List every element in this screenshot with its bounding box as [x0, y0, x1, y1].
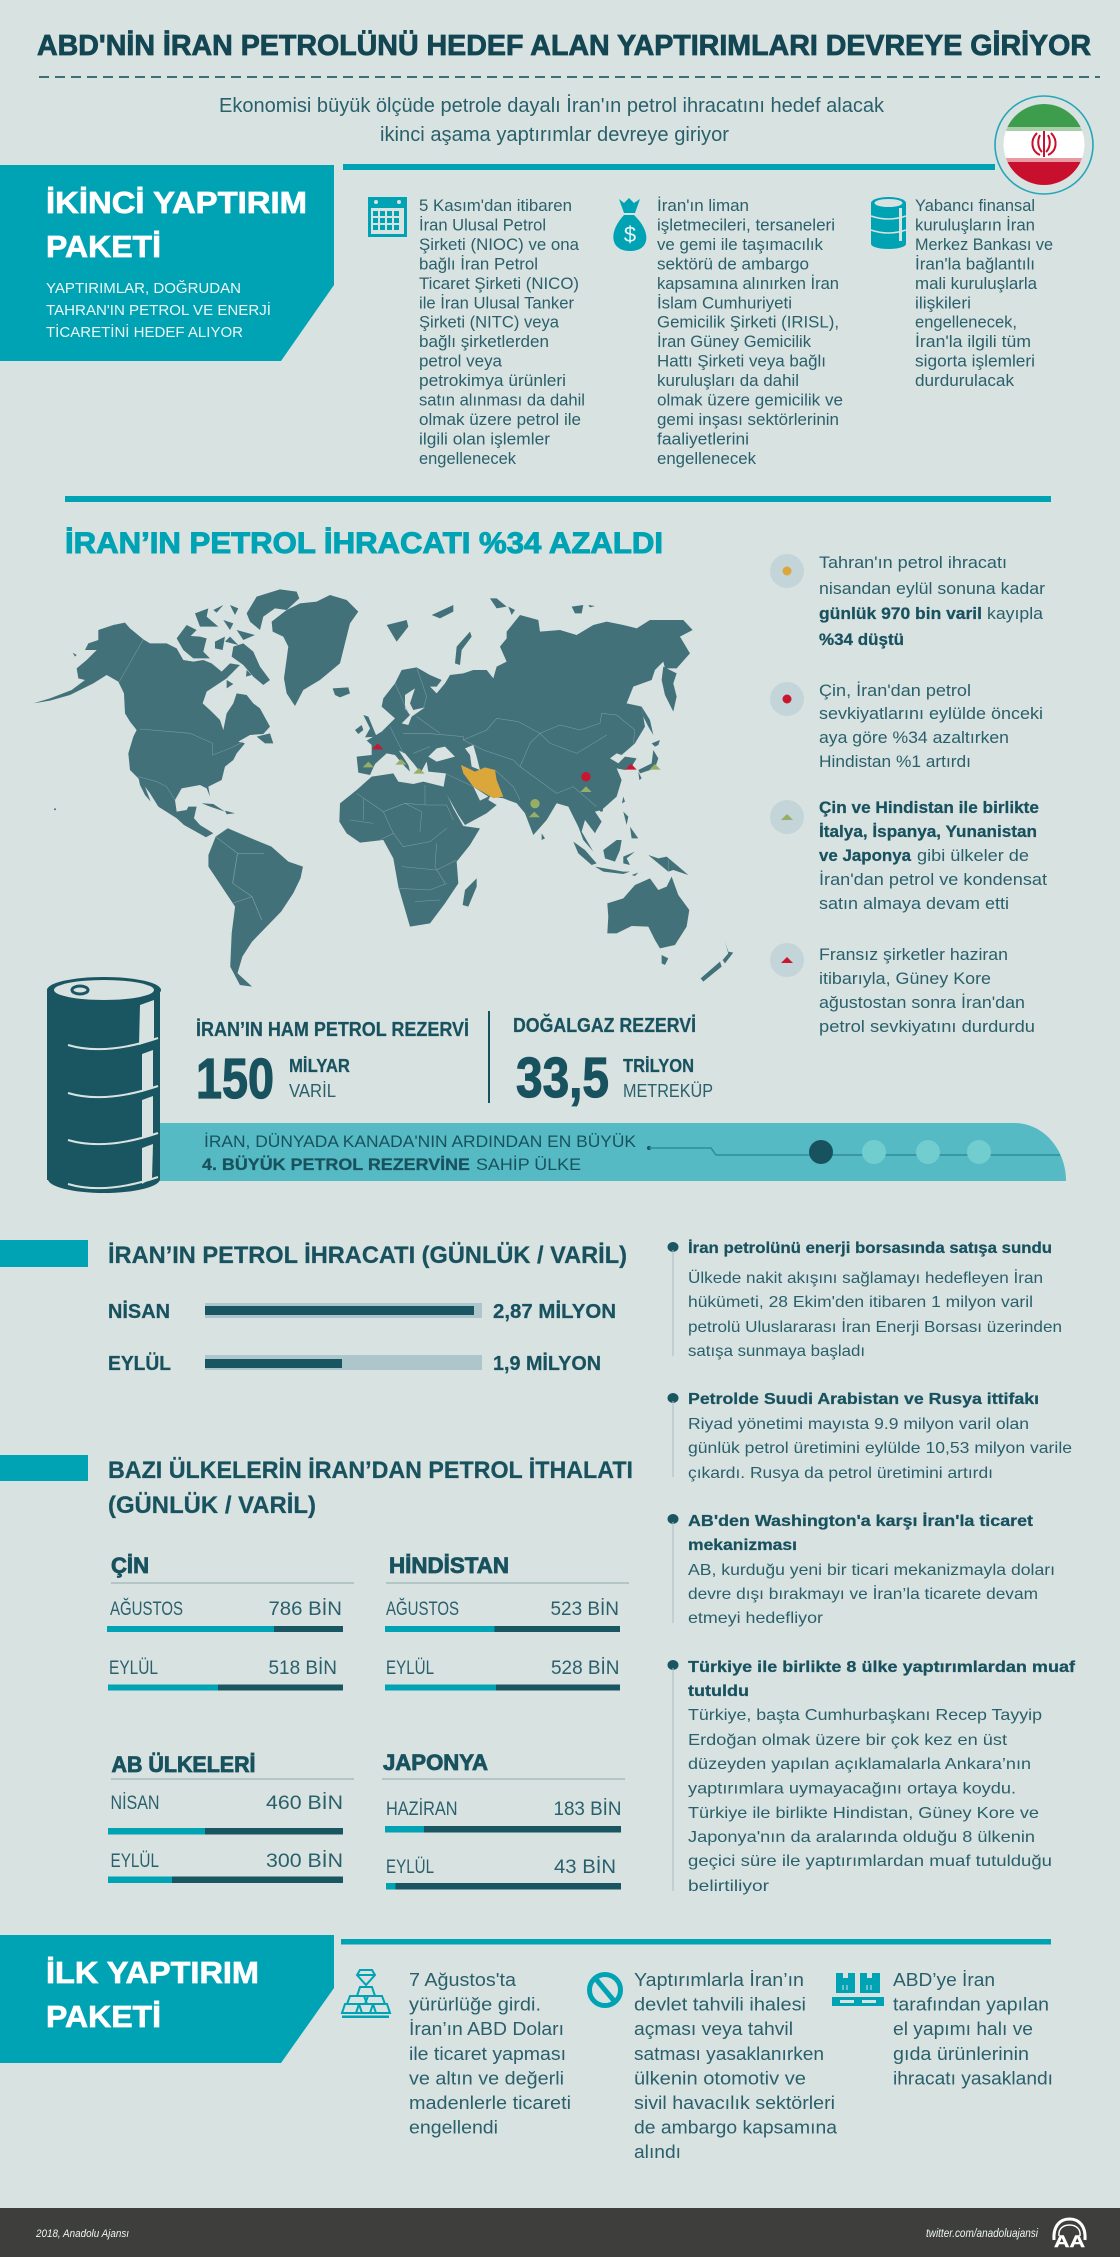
subtitle: [219, 94, 885, 146]
chart: Japan imports: HAZİRAN: [386, 1799, 458, 1820]
text: first package column 3: ihracatı yasaklandı: [893, 2068, 1053, 2088]
chart: India imports: 528 BİN: [551, 1658, 620, 1679]
news: energy exchange: İran petrolünü enerji borsasında satışa sundu: [688, 1239, 1052, 1257]
banner: fourth largest reserve: SAHİP ÜLKE: [476, 1155, 581, 1174]
text: column 3: Yabancı finansal: [915, 197, 1035, 215]
news: Turkey exemption: belirtiliyor: [688, 1878, 770, 1895]
text: column 1: Şirketi (NITC) veya: [419, 314, 560, 332]
panel: first sanctions package: [0, 1935, 334, 2063]
legend: China and India: [770, 681, 1043, 771]
divider bar: export section: [65, 496, 1051, 502]
news: energy exchange: [668, 1239, 1062, 1360]
panel: second sanctions package: PAKETİ: [46, 229, 161, 264]
text: column 2: İran Güney Gemicilik: [657, 332, 812, 351]
news: energy exchange: hükümeti, 28 Ekim'den itibaren 1 milyon varil: [688, 1294, 1033, 1311]
text: column 1: bağlı şirketlerden: [419, 333, 549, 351]
chart: EU imports: 460 BİN: [266, 1793, 343, 1814]
heading: daily exports: İRAN’IN PETROL İHRACATI (GÜNLÜK / VARİL): [108, 1242, 627, 1269]
chart: EU imports: NİSAN: [110, 1793, 160, 1814]
panel: second sanctions package: TAHRAN'IN PETROL VE ENERJİ: [46, 301, 271, 319]
news: Turkey exemption: tutuldu: [688, 1683, 749, 1700]
news: Saudi Russia alliance: çıkardı. Rusya da petrol üretimini artırdı: [688, 1465, 993, 1482]
text: column 3: sigorta işlemleri: [915, 353, 1035, 371]
chart: Japan imports: JAPONYA: [383, 1750, 488, 1775]
chart: China imports: 786 BİN: [268, 1599, 342, 1620]
news: Turkey exemption: geçici süre ile yaptırımlardan muaf tutulduğu: [688, 1853, 1052, 1870]
chart: India imports: EYLÜL: [386, 1658, 434, 1679]
news: Turkey exemption: düzeyden yapılan açıklamalarla Ankara’nın: [688, 1756, 1031, 1773]
legend: continuing buyers: Çin ve Hindistan ile birlikte: [819, 799, 1039, 817]
legend: China and India: Çin, İran'dan petrol: [819, 681, 971, 700]
stat: crude oil reserve: [196, 1018, 469, 1111]
news: Turkey exemption: Türkiye ile birlikte Hindistan, Güney Kore ve: [688, 1805, 1039, 1822]
chart: Japan imports: 43 BİN: [554, 1857, 616, 1878]
text: column 3: İran'la bağlantılı: [915, 254, 1035, 273]
text: first package column 1: ile ticaret yapması: [409, 2044, 566, 2064]
world map: [33, 589, 733, 987]
chart: India imports: HİNDİSTAN: [389, 1553, 509, 1578]
icon: small barrel: [871, 197, 906, 249]
chart: India imports: 523 BİN: [550, 1599, 619, 1620]
text: column 1: bağlı İran Petrol: [419, 254, 538, 273]
text: column 2: sektörü de ambargo: [657, 255, 809, 273]
legend: export decline: günlük 970 bin varil: [819, 605, 982, 623]
legend: stopped buyers: [770, 943, 1035, 1036]
legend: export decline: %34 düştü: [819, 631, 904, 649]
news: EU trade mechanism: devre dışı bırakmayı ve İran’la ticarete devam: [688, 1584, 1038, 1603]
chart: China imports: AĞUSTOS: [110, 1598, 183, 1620]
chart: EU imports: EYLÜL: [110, 1851, 159, 1872]
text: column 2: engellenecek: [657, 450, 757, 468]
legend: continuing buyers: ve Japonya: [819, 847, 912, 865]
subtitle: Ekonomisi büyük ölçüde petrole dayalı İran'ın petrol ihracatını hedef alacak: [219, 94, 885, 117]
text: first package column 3: gıda ürünlerinin: [893, 2044, 1029, 2064]
text: column 2: Hattı Şirketi veya bağlı: [657, 353, 826, 371]
text: first package column 1: [409, 1970, 571, 2138]
icon: large oil barrel: [47, 977, 161, 1193]
chart: India imports: AĞUSTOS: [386, 1598, 459, 1620]
icon: Anadolu Agency logo: AA: [1054, 2232, 1085, 2251]
news: Turkey exemption: Japonya'nın da aralarında olduğu 8 ülkenin: [688, 1829, 1035, 1846]
footer: [0, 2208, 1120, 2257]
footer: twitter.com/anadoluajansi: [926, 2226, 1038, 2240]
text: column 3: mali kuruluşlarla: [915, 275, 1038, 293]
chart: China imports: EYLÜL: [109, 1658, 158, 1679]
legend: stopped buyers: Fransız şirketler haziran: [819, 946, 1008, 964]
chart: India imports: [385, 1553, 629, 1690]
text: first package column 3: el yapımı halı ve: [893, 2019, 1033, 2039]
news: Turkey exemption: [668, 1659, 1076, 1895]
legend: continuing buyers: İtalya, İspanya, Yunanistan: [819, 823, 1037, 841]
bar chart: daily exports: [108, 1300, 616, 1375]
text: first package column 2: Yaptırımlarla İran’ın: [634, 1970, 804, 1990]
heading: country imports: BAZI ÜLKELERİN İRAN’DAN PETROL İTHALATI: [108, 1457, 633, 1484]
text: column 2: olmak üzere gemicilik ve: [657, 392, 843, 410]
news: EU trade mechanism: etmeyi hedefliyor: [688, 1610, 824, 1627]
footer: 2018, Anadolu Ajansı: [35, 2228, 129, 2240]
text: column 1: engellenecek: [419, 450, 517, 468]
chart: EU imports: 300 BİN: [266, 1851, 343, 1872]
text: column 3: İran'la ilgili tüm: [915, 332, 1031, 351]
legend: continuing buyers: [770, 799, 1047, 913]
icon: prohibition sign: [590, 1974, 620, 2006]
text: column 2: kapsamına alınırken İran: [657, 274, 839, 293]
text: first package column 3: ABD’ye İran: [893, 1970, 995, 1990]
title: ABD'NİN İRAN PETROLÜNÜ HEDEF ALAN YAPTIRIMLARI DEVREYE GİRİYOR: [37, 29, 1091, 62]
section marker: exports: [0, 1240, 88, 1267]
legend: continuing buyers: gibi ülkeler de: [917, 847, 1029, 865]
news: energy exchange: satışa sunmaya başladı: [688, 1343, 865, 1360]
heading: country imports: [108, 1457, 633, 1519]
legend: export decline: kayıpla: [987, 605, 1044, 623]
bar chart: daily exports: 2,87 MİLYON: [493, 1300, 616, 1323]
stat: crude oil reserve: MİLYAR: [289, 1056, 350, 1076]
icon: money bag: $: [624, 222, 636, 247]
news: energy exchange: Ülkede nakit akışını sağlamayı hedefleyen İran: [688, 1268, 1043, 1287]
text: first package column 1: madenlerle ticareti: [409, 2093, 571, 2113]
divider bar: second package: [343, 164, 995, 170]
text: first package column 1: 7 Ağustos'ta: [409, 1970, 517, 1990]
text: column 1: ile İran Ulusal Tanker: [419, 293, 574, 312]
legend: China and India: Hindistan %1 artırdı: [819, 753, 971, 771]
icon: boxes on pallet: [832, 1973, 884, 2006]
text: first package column 2: satması yasaklanırken: [634, 2044, 824, 2064]
news: Turkey exemption: Türkiye, başta Cumhurbaşkanı Recep Tayyip: [688, 1707, 1042, 1724]
text: first package column 1: ve altın ve değerli: [409, 2068, 564, 2088]
news: EU trade mechanism: mekanizması: [688, 1537, 797, 1554]
stat: natural gas reserve: METREKÜP: [623, 1081, 713, 1101]
text: column 2: ve gemi ile taşımacılık: [657, 236, 824, 254]
text: first package column 2: ülkenin otomotiv ve: [634, 2068, 806, 2088]
text: first package column 3: tarafından yapılan: [893, 1995, 1049, 2015]
panel: second sanctions package: YAPTIRIMLAR, DOĞRUDAN: [46, 280, 241, 297]
heading: country imports: (GÜNLÜK / VARİL): [108, 1492, 316, 1519]
text: column 2: faaliyetlerini: [657, 430, 749, 448]
chart: EU imports: AB ÜLKELERİ: [112, 1752, 256, 1777]
text: column 3: engellenecek,: [915, 314, 1017, 332]
news: Saudi Russia alliance: Petrolde Suudi Arabistan ve Rusya ittifakı: [688, 1391, 1039, 1408]
news: energy exchange: petrolü Uluslararası İran Enerji Borsası üzerinden: [688, 1317, 1062, 1336]
subtitle: ikinci aşama yaptırımlar devreye giriyor: [380, 124, 729, 146]
panel: second sanctions package: İKİNCİ YAPTIRIM: [46, 185, 307, 220]
stat: natural gas reserve: [513, 1013, 713, 1110]
section marker: imports: [0, 1455, 88, 1481]
text: column 1: olmak üzere petrol ile: [419, 411, 581, 429]
legend: stopped buyers: itibarıyla, Güney Kore: [819, 970, 991, 988]
chart: China imports: ÇİN: [111, 1553, 149, 1578]
divider bar: first package: [341, 1939, 1051, 1944]
text: column 1: satın alınması da dahil: [419, 392, 585, 410]
map markers: [363, 743, 661, 817]
text: first package column 2: alındı: [634, 2142, 681, 2162]
text: column 2: [657, 196, 843, 468]
text: column 2: Gemicilik Şirketi (IRISL),: [657, 314, 839, 332]
bar chart: daily exports: 1,9 MİLYON: [493, 1352, 601, 1375]
panel: second sanctions package: [0, 165, 334, 361]
map highlight: Iran: [461, 765, 503, 798]
text: column 1: Ticaret Şirketi (NICO): [419, 275, 579, 293]
text: column 3: [915, 197, 1053, 390]
text: first package column 2: sivil havacılık sektörleri: [634, 2093, 835, 2113]
stat: crude oil reserve: 150: [196, 1047, 274, 1111]
chart: Japan imports: 183 BİN: [554, 1799, 622, 1820]
legend: China and India: sevkiyatlarını eylülde önceki: [819, 705, 1043, 723]
text: column 2: kuruluşları da dahil: [657, 372, 799, 390]
news: EU trade mechanism: AB, kurduğu yeni bir ticari mekanizmayla doları: [688, 1562, 1055, 1579]
banner: fourth largest reserve: [150, 1123, 1066, 1181]
stat: natural gas reserve: TRİLYON: [623, 1056, 694, 1076]
text: column 2: İran'ın liman: [657, 196, 749, 215]
text: first package column 2: [634, 1970, 838, 2162]
legend: continuing buyers: İran'dan petrol ve kondensat: [819, 870, 1047, 889]
text: column 3: Merkez Bankası ve: [915, 236, 1053, 254]
bar chart: daily exports: NİSAN: [108, 1300, 170, 1323]
legend: export decline: Tahran'ın petrol ihracatı: [819, 554, 1007, 572]
legend: export decline: [770, 554, 1046, 649]
chart: Japan imports: [382, 1750, 625, 1890]
text: column 1: petrokimya ürünleri: [419, 372, 566, 390]
text: first package column 1: İran’ın ABD Doları: [409, 2019, 564, 2039]
text: column 3: ilişkileri: [915, 294, 971, 312]
stat: crude oil reserve: İRAN’IN HAM PETROL REZERVİ: [196, 1018, 469, 1041]
text: first package column 1: yürürlüğe girdi.: [409, 1995, 541, 2015]
icon: gold bars and diamond: [342, 1970, 390, 2018]
text: column 3: kuruluşların İran: [915, 216, 1035, 234]
chart: EU imports: [108, 1752, 354, 1883]
legend: stopped buyers: ağustostan sonra İran'dan: [819, 993, 1025, 1012]
text: column 2: gemi inşası sektörlerinin: [657, 411, 839, 429]
stat: crude oil reserve: VARİL: [289, 1081, 336, 1101]
news: Turkey exemption: yaptırımlara uymayacağını ortaya koydu.: [688, 1780, 1016, 1798]
text: column 2: İslam Cumhuriyeti: [657, 293, 792, 312]
news: EU trade mechanism: [668, 1512, 1055, 1627]
icon: Anadolu Agency logo: [1054, 2219, 1085, 2251]
bar chart: daily exports: EYLÜL: [108, 1352, 171, 1375]
legend: China and India: aya göre %34 azaltırken: [819, 729, 1009, 747]
text: column 1: [419, 197, 585, 468]
legend: stopped buyers: petrol sevkiyatını durdurdu: [819, 1018, 1035, 1036]
news: Turkey exemption: Erdoğan olmak üzere bir çok kez en üst: [688, 1732, 1008, 1749]
icon: money bag: [613, 198, 646, 251]
text: column 3: durdurulacak: [915, 372, 1015, 390]
stat: natural gas reserve: DOĞALGAZ REZERVİ: [513, 1013, 696, 1037]
text: column 1: 5 Kasım'dan itibaren: [419, 197, 572, 215]
text: column 1: ilgili olan işlemler: [419, 430, 551, 448]
panel: first sanctions package: PAKETİ: [46, 1999, 161, 2034]
banner: fourth largest reserve: İRAN, DÜNYADA KANADA'NIN ARDINDAN EN BÜYÜK: [204, 1132, 637, 1151]
text: column 1: Şirketi (NIOC) ve ona: [419, 236, 580, 254]
chart: China imports: 518 BİN: [268, 1658, 337, 1679]
news: Saudi Russia alliance: günlük petrol üretimini eylülde 10,53 milyon varile: [688, 1440, 1072, 1457]
stat: natural gas reserve: 33,5: [516, 1046, 609, 1110]
text: first package column 3: [893, 1970, 1053, 2088]
legend: continuing buyers: satın almaya devam etti: [819, 895, 1009, 913]
text: column 1: İran Ulusal Petrol: [419, 216, 546, 234]
news: Turkey exemption: Türkiye ile birlikte 8 ülke yaptırımlardan muaf: [688, 1659, 1076, 1676]
chart: Japan imports: EYLÜL: [386, 1857, 434, 1878]
text: first package column 1: engellendi: [409, 2118, 498, 2138]
news: Saudi Russia alliance: Riyad yönetimi mayısta 9.9 milyon varil olan: [688, 1416, 1029, 1433]
news: Saudi Russia alliance: [668, 1391, 1072, 1482]
banner: fourth largest reserve: 4. BÜYÜK PETROL REZERVİNE: [202, 1155, 470, 1174]
panel: second sanctions package: TİCARETİNİ HEDEF ALIYOR: [46, 323, 243, 341]
text: column 2: işletmecileri, tersaneleri: [657, 216, 835, 234]
icon: Iran flag: [995, 96, 1093, 194]
text: first package column 2: de ambargo kapsamına: [634, 2118, 838, 2138]
heading: exports fell: İRAN’IN PETROL İHRACATI %34 AZALDI: [65, 527, 663, 560]
chart: China imports: [107, 1553, 354, 1690]
news: EU trade mechanism: AB'den Washington'a karşı İran'la ticaret: [688, 1512, 1034, 1530]
text: first package column 2: açması veya tahvil: [634, 2019, 793, 2039]
icon: calendar: [368, 197, 407, 237]
legend: export decline: nisandan eylül sonuna kadar: [819, 580, 1046, 598]
text: first package column 2: devlet tahvili ihalesi: [634, 1995, 806, 2015]
panel: first sanctions package: İLK YAPTIRIM: [46, 1955, 259, 1990]
text: column 1: petrol veya: [419, 353, 503, 371]
